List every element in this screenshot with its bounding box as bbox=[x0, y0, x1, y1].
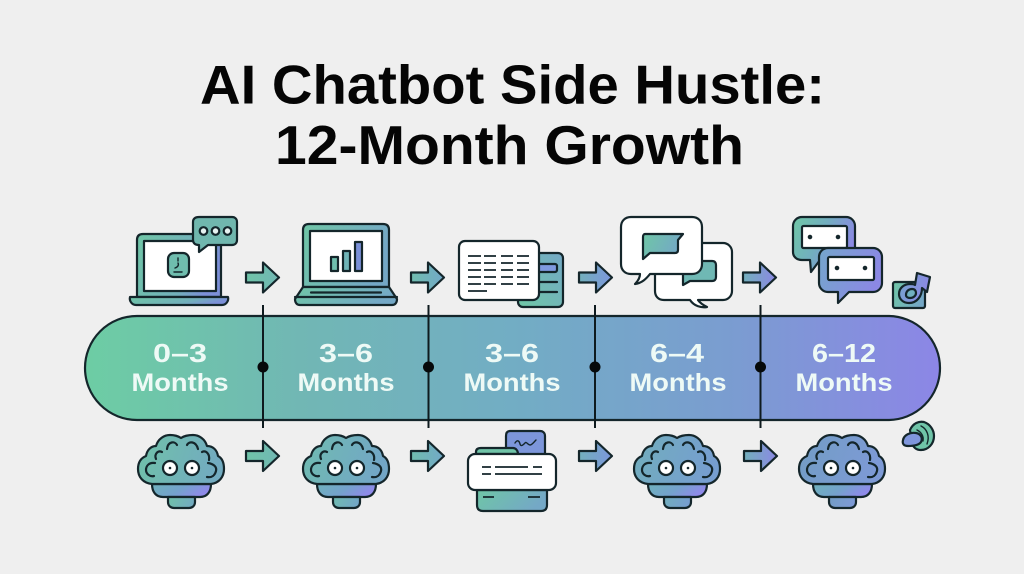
label: 6-12 months: 6–12 bbox=[812, 338, 876, 368]
arrow: bottom 3 bbox=[579, 441, 612, 471]
label: 3-6 months: 3–6 bbox=[319, 338, 373, 368]
label: 6-12 months bbox=[796, 338, 892, 397]
arrow: bottom 4 bbox=[744, 441, 777, 471]
label: 0-3 months bbox=[132, 338, 228, 397]
icon: paired chat bubbles bbox=[793, 217, 882, 303]
icon: small ear shape bbox=[903, 422, 934, 450]
title: 12-Month Growth bbox=[275, 114, 744, 176]
milestone divider 3 bbox=[590, 305, 600, 428]
label: 6-4 months bbox=[630, 338, 726, 397]
label: 0-3 months: Months bbox=[132, 369, 228, 397]
label: 3-6 months second: 3–6 bbox=[485, 338, 539, 368]
arrow: bottom 1 bbox=[246, 441, 279, 471]
arrow: top 3 bbox=[579, 262, 612, 292]
arrow: top 4 bbox=[743, 262, 776, 292]
label: 0-3 months: 0–3 bbox=[153, 338, 207, 368]
label: 3-6 months bbox=[298, 338, 394, 397]
label: 3-6 months: Months bbox=[298, 369, 394, 397]
milestone divider 2 bbox=[423, 305, 434, 428]
icon: laptop with bar chart bbox=[295, 224, 397, 305]
label: 3-6 months second bbox=[464, 338, 560, 397]
title: AI Chatbot Side Hustle: bbox=[200, 54, 825, 116]
label: 6-12 months: Months bbox=[796, 369, 892, 397]
arrow: bottom 2 bbox=[411, 441, 444, 471]
icon: printer with document bbox=[468, 431, 556, 511]
icon: overlapping white chat bubbles bbox=[621, 217, 732, 307]
arrow: top 1 bbox=[246, 262, 279, 292]
icon: data table documents bbox=[459, 241, 563, 307]
brain: 4 bbox=[799, 435, 885, 508]
label: 3-6 months second: Months bbox=[464, 369, 560, 397]
label: 6-4 months: 6–4 bbox=[650, 338, 705, 368]
timeline bar bbox=[85, 305, 940, 428]
icon: music note tile bbox=[893, 273, 930, 308]
brain: 3 bbox=[634, 435, 720, 508]
brain: 2 bbox=[303, 435, 389, 508]
icon: laptop with chat bubble bbox=[130, 217, 237, 305]
arrow: top 2 bbox=[411, 262, 444, 292]
milestone divider 4 bbox=[755, 305, 766, 428]
label: 6-4 months: Months bbox=[630, 369, 726, 397]
milestone divider 1 bbox=[258, 305, 268, 428]
title bbox=[200, 54, 825, 176]
brain: 1 bbox=[138, 435, 224, 508]
